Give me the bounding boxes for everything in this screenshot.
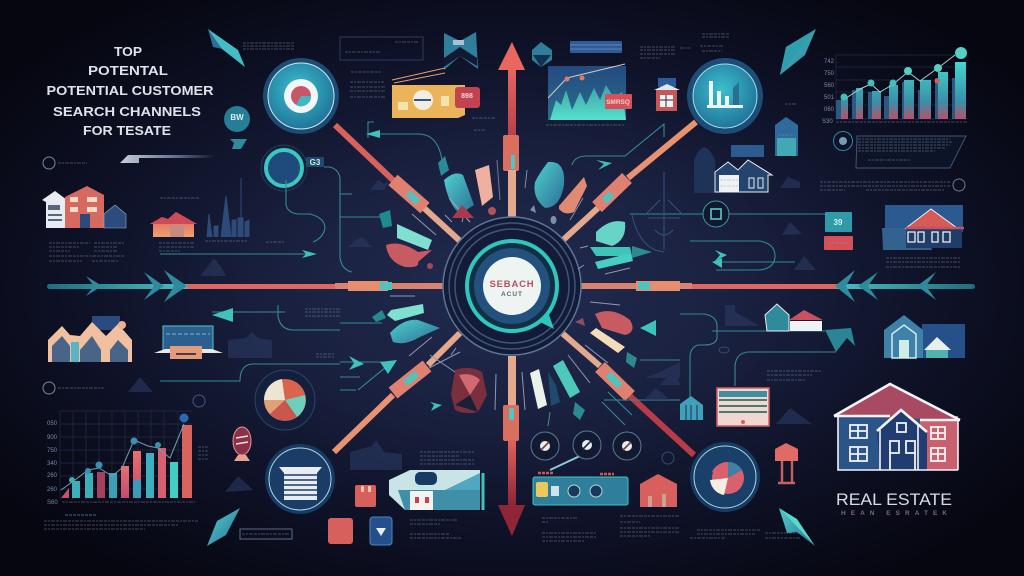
title: TOP [114, 44, 142, 59]
line chart, top right [822, 47, 967, 125]
bow icon [444, 32, 478, 70]
teal blob cluster, lower left [372, 296, 440, 356]
teal blob cluster, top right [525, 162, 587, 224]
houses, row right of axis [765, 304, 823, 331]
right caption strip [820, 179, 965, 191]
badge and glyph under title [224, 106, 250, 149]
panel: right caption [834, 132, 966, 168]
pie chart [255, 370, 315, 430]
left arrow and caption, below axis [305, 309, 340, 357]
control card [533, 473, 628, 505]
magnifier: target, top left [263, 58, 339, 134]
teal capsules, lower center-right [522, 355, 590, 420]
area chart panel: SMRSQ [606, 99, 630, 106]
caption text, upper left [49, 243, 125, 261]
wire glyph [632, 172, 683, 252]
magnifier: bar chart, top right [687, 58, 763, 134]
bar chart, bottom left: 050 [47, 421, 58, 427]
small arrowheads [212, 130, 727, 411]
ring with icon and tags [703, 201, 853, 250]
badge and glyph under title: BW [230, 113, 244, 122]
three peaked houses [48, 316, 132, 362]
bottom-left diamond [207, 508, 240, 546]
vertical arrow up [498, 42, 525, 218]
real estate wordmark: REAL ESTATE [836, 491, 952, 509]
bottom-left caption [44, 515, 292, 539]
ring node with tag: G3 [310, 158, 321, 167]
red house and skyline [150, 178, 284, 251]
teal envelope card [389, 452, 483, 538]
big house logo [834, 384, 960, 470]
coral blobs, lower right [575, 302, 637, 368]
line chart, top right: 742 [824, 59, 835, 65]
diagonal arrows [334, 122, 696, 455]
houses, upper left [42, 186, 126, 228]
hexagon and blue bar [532, 41, 622, 67]
bust icon [233, 427, 251, 461]
teal blob cluster, right [578, 221, 652, 274]
horizontal axis, left [47, 270, 445, 302]
bar chart, bottom left: 340 [47, 461, 58, 467]
small red and blue tags [328, 485, 392, 545]
form card [717, 388, 769, 426]
blue arrow house [680, 396, 703, 420]
bar chart, bottom left: 260 [47, 473, 58, 479]
house, right middle [882, 205, 964, 267]
vertical arrow down [498, 356, 525, 536]
ring node with tag [261, 145, 324, 191]
right text snippets [690, 347, 822, 538]
top-right diamond [780, 29, 816, 75]
bottom center text [542, 452, 680, 541]
small blue tower [775, 117, 798, 156]
three dials [531, 431, 641, 460]
top-left diamond [208, 29, 245, 67]
yellow ticket card: 898 [461, 93, 473, 100]
small red house with window [654, 78, 680, 111]
bar chart, bottom left: 750 [47, 448, 58, 454]
bar chart, bottom left: 260 [47, 487, 58, 493]
horizontal axis, right [578, 270, 975, 302]
plane arrow [825, 328, 855, 352]
ring with icon and tags: 39 [834, 218, 843, 227]
left teal and coral capsules, top left cluster [438, 156, 500, 222]
center search hub: SEBACH [490, 279, 534, 290]
center search hub: ACUT [501, 291, 523, 298]
ghost house silhouettes [128, 177, 816, 492]
blue house pair [884, 315, 965, 358]
left row 2 caption [43, 382, 104, 394]
red figure icon [775, 443, 798, 483]
bottom-right diamond [779, 508, 815, 546]
title: FOR TESATE [83, 123, 171, 138]
line chart, top right: 560 [824, 83, 835, 89]
area chart panel [546, 64, 632, 125]
lower-left capsules, top cluster [379, 210, 436, 269]
left row 1 caption [43, 157, 87, 169]
gradient divider bar [120, 155, 215, 163]
bar chart, bottom left: S60 [47, 500, 58, 506]
connector lines [160, 122, 836, 470]
center search hub [443, 217, 581, 355]
yellow ticket card [392, 68, 480, 118]
title: SEARCH CHANNELS [53, 104, 201, 119]
line chart, top right: S30 [822, 119, 833, 125]
real estate wordmark: HEAN ESRATEK [841, 510, 949, 517]
text block top-left of center [243, 37, 495, 130]
magnifier: stacked list, bottom left [265, 444, 335, 514]
title: POTENTIAL CUSTOMER [46, 83, 214, 98]
title: POTENTAL [88, 63, 168, 78]
title [46, 44, 214, 138]
red barn [640, 474, 677, 507]
magnifier: pie, bottom right [690, 442, 760, 512]
line chart, top right: 060 [824, 107, 835, 113]
bar chart, bottom left: 900 [47, 435, 58, 441]
line chart, top right: 501 [824, 95, 835, 101]
twin house with tower [694, 145, 772, 193]
text block top center-right [640, 34, 797, 104]
dark-red blob, lower center-left [429, 348, 496, 413]
laptop panel [154, 326, 223, 359]
line chart, top right: 750 [824, 71, 835, 77]
bar chart, bottom left [47, 395, 208, 506]
real estate wordmark [836, 491, 952, 517]
